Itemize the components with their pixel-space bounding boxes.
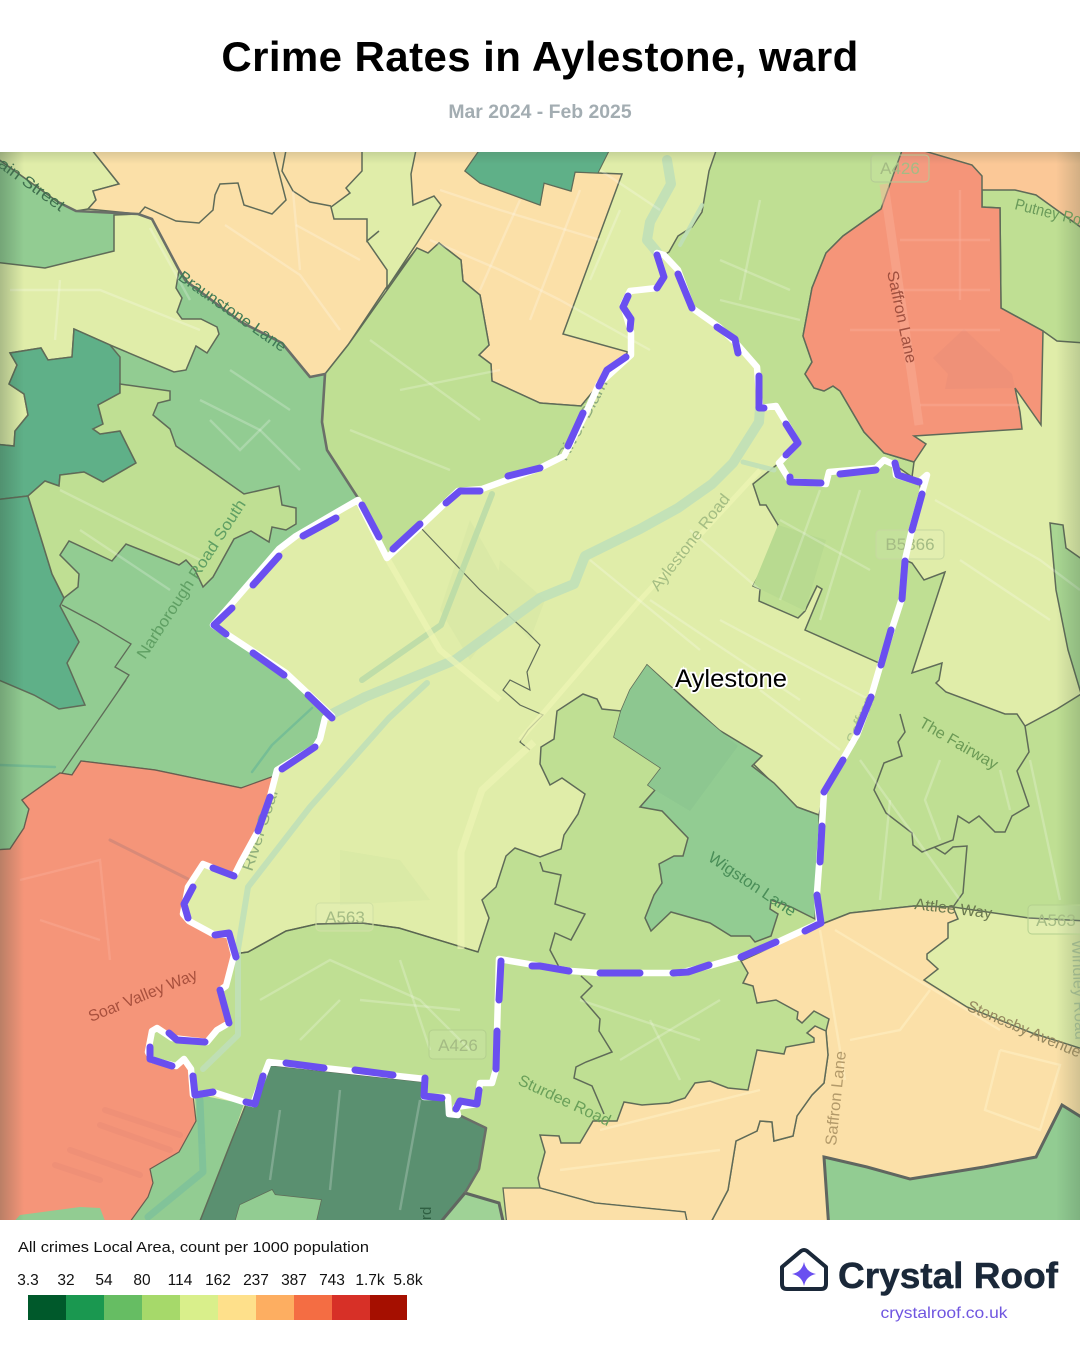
region: green notch bottom xyxy=(234,1190,321,1226)
legend scale labels: 387 xyxy=(281,1272,307,1289)
road labels: Aylestone Road xyxy=(648,491,734,594)
Wigston darker patch xyxy=(614,665,738,811)
region: green strip under salmon xyxy=(10,1207,107,1226)
legend scale labels: 5.8k xyxy=(393,1272,423,1289)
streets xyxy=(10,170,1080,1210)
legend scale labels: 237 xyxy=(243,1272,269,1289)
legend scale labels: 80 xyxy=(133,1272,151,1289)
title: Crime Rates in Aylestone, ward xyxy=(221,33,859,80)
legend scale labels: 3.3 xyxy=(17,1272,39,1289)
road labels: River Soar xyxy=(240,785,283,873)
region: mid-green southern belt xyxy=(148,560,1080,1226)
road shields: A563 xyxy=(325,908,365,927)
region: orange south sliver xyxy=(503,1188,688,1226)
region: salmon north-east xyxy=(803,145,1043,462)
road labels: The Fairway xyxy=(916,715,1001,773)
road shields: A426 xyxy=(880,159,920,178)
ward fill xyxy=(148,253,927,1115)
place label: Aylestone: Aylestone xyxy=(675,665,787,693)
region: orange north-west xyxy=(88,145,628,406)
road labels: Wigston Lane xyxy=(705,849,799,920)
legend scale labels: 114 xyxy=(168,1272,193,1289)
road labels xyxy=(0,155,1080,1220)
region: dark green south park xyxy=(198,1065,486,1226)
legend scale labels: 743 xyxy=(319,1272,345,1289)
road labels: Braunstone Lane xyxy=(175,268,289,356)
region: orange south-east xyxy=(709,906,1080,1226)
region: green beside park xyxy=(434,1193,505,1230)
region: salmon south-west xyxy=(0,761,274,1226)
road labels: rd xyxy=(418,1207,435,1220)
region: orange top right xyxy=(904,145,1080,231)
road labels: Saffron Lane xyxy=(823,1050,850,1146)
region: Wigston Lane green xyxy=(614,665,820,942)
rivers xyxy=(0,160,774,1217)
logo: Crystal Roof xyxy=(780,1248,1059,1322)
road shields: B5366 xyxy=(885,535,935,554)
road labels: River Biam xyxy=(555,376,612,464)
region: western green area xyxy=(0,156,358,850)
darker park patch xyxy=(753,525,826,611)
region: darker green south-west xyxy=(0,496,85,709)
region: right edge green xyxy=(1050,523,1080,710)
map edge fade xyxy=(0,152,1080,1220)
road shields: A563 xyxy=(1036,911,1076,930)
legend scale labels xyxy=(17,1272,423,1289)
road labels: Sturdee Road xyxy=(515,1072,613,1130)
boundary lines in orange area xyxy=(139,145,331,223)
website link: crystalroof.co.uk xyxy=(880,1305,1009,1322)
region: green south-east corner xyxy=(824,1105,1080,1230)
region: mid-green centre north xyxy=(322,243,600,558)
legend scale labels: 54 xyxy=(95,1272,113,1289)
road labels: Narborough Road South xyxy=(134,497,250,662)
salmon road patches xyxy=(55,840,190,1180)
region: pale gap north xyxy=(331,145,441,288)
region: mid-green right xyxy=(982,190,1080,343)
road labels: Saffron xyxy=(844,694,878,746)
ward boundary: Aylestone dashed outline xyxy=(148,253,927,1115)
region: dark green top xyxy=(465,145,612,205)
region: north-west pale area xyxy=(0,214,219,446)
salmon darker patch xyxy=(933,329,1015,389)
faint shading inside ward xyxy=(340,520,545,905)
subtitle: date range: Mar 2024 - Feb 2025 xyxy=(448,101,632,123)
wordmark: Crystal Roof xyxy=(838,1255,1059,1296)
icon: house with sparkle xyxy=(782,1250,826,1289)
region: green strip south-west xyxy=(127,1094,244,1226)
region: darker green west xyxy=(0,329,136,500)
road shields: A426 xyxy=(438,1036,478,1055)
road labels: Soar Valley Way xyxy=(86,966,200,1026)
thick roads boundaries xyxy=(58,202,486,1193)
region: orange south xyxy=(538,1026,828,1226)
road labels: Saffron Lane xyxy=(883,269,919,365)
legend scale labels: 162 xyxy=(205,1272,231,1289)
choropleth map xyxy=(0,152,1080,1220)
region: mid-green north-east of ward interior xyxy=(753,460,922,663)
road labels: Attlee Way xyxy=(914,896,993,922)
legend colour scale xyxy=(28,1295,407,1320)
road shields xyxy=(316,155,1080,1059)
thin A563 boundary line xyxy=(234,923,478,954)
region: mid-green west xyxy=(28,384,296,598)
region: top-left pale corner xyxy=(0,145,119,211)
inner boundary lines south-east xyxy=(62,527,967,1114)
legend scale labels: 1.7k xyxy=(355,1272,385,1289)
region: mid-green north-east xyxy=(664,145,914,484)
inner boundary: The Fairway xyxy=(874,714,1029,852)
legend xyxy=(17,1239,423,1320)
legend title: All crimes Local Area, count per 1000 population xyxy=(18,1239,369,1256)
legend scale labels: 32 xyxy=(57,1272,75,1289)
